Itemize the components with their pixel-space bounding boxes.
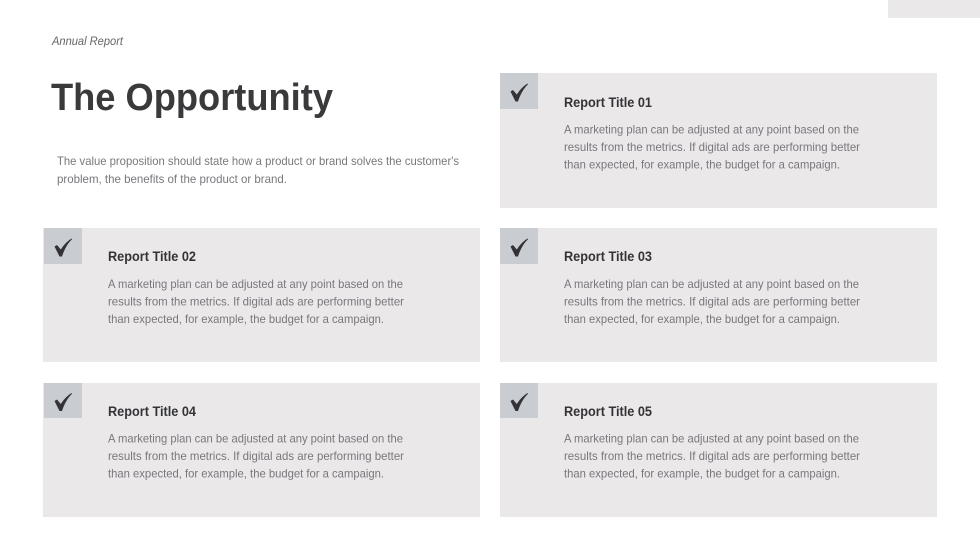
panel: report 02 [43,228,480,362]
body 05: A marketing plan can be adjusted at any point based on the [564,432,859,446]
icon: checkmark 04 [44,383,82,418]
body 01: results from the metrics. If digital ads are performing better [564,140,860,154]
heading 03: Report Title 03 [564,249,652,264]
body 05 [564,432,860,480]
body 01: than expected, for example, the budget for a campaign. [564,158,840,172]
body 02: A marketing plan can be adjusted at any point based on the [108,277,403,291]
panel: report 03 [500,228,937,362]
heading 05: Report Title 05 [564,404,652,419]
heading 01: Report Title 01 [564,95,652,110]
body 01 [564,122,860,172]
intro text: The value proposition should state how a product or brand solves the customer's [57,154,459,168]
body 03 [564,277,860,326]
body 03: than expected, for example, the budget for a campaign. [564,312,840,326]
intro text: problem, the benefits of the product or brand. [57,172,287,186]
panel: report 05 [500,383,937,517]
icon: checkmark 01 [500,73,538,109]
body 02: than expected, for example, the budget for a campaign. [108,312,384,326]
body 04: results from the metrics. If digital ads are performing better [108,449,404,463]
icon: checkmark 02 [44,228,82,264]
panel: report 01 [500,73,937,208]
eyebrow: Annual Report: Annual Report [51,34,124,48]
body 05: than expected, for example, the budget for a campaign. [564,466,840,480]
icon: checkmark 05 [500,383,538,418]
body 04 [108,432,404,480]
panel: report 04 [43,383,480,517]
body 04: than expected, for example, the budget for a campaign. [108,466,384,480]
corner tab [888,0,980,18]
body 05: results from the metrics. If digital ads are performing better [564,449,860,463]
icon: checkmark 03 [500,228,538,264]
body 02: results from the metrics. If digital ads are performing better [108,294,404,308]
body 03: results from the metrics. If digital ads are performing better [564,294,860,308]
intro text [57,154,459,186]
heading 04: Report Title 04 [108,404,196,419]
heading 02: Report Title 02 [108,249,196,264]
body 01: A marketing plan can be adjusted at any point based on the [564,122,859,136]
body 03: A marketing plan can be adjusted at any point based on the [564,277,859,291]
body 04: A marketing plan can be adjusted at any point based on the [108,432,403,446]
title: The Opportunity [51,77,333,119]
body 02 [108,277,404,326]
